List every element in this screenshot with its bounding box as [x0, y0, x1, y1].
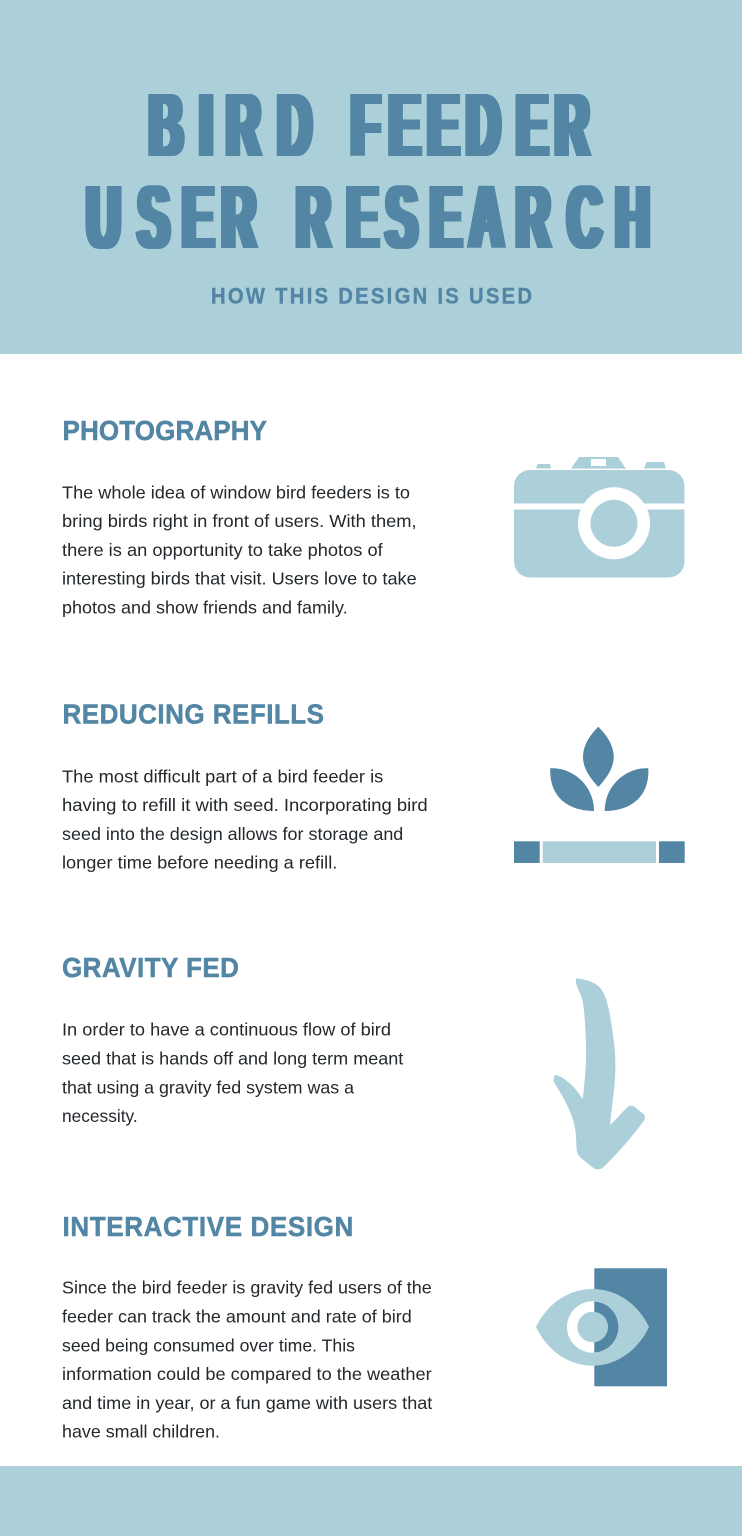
text block: reducing refills: longer time before needing a refill.: [62, 853, 337, 873]
text block: photography: photos and show friends and family.: [62, 598, 348, 618]
text block: reducing refills: [62, 766, 428, 873]
text block: gravity fed: necessity.: [62, 1106, 138, 1126]
panel: gravity fed: [62, 952, 645, 1169]
panel: photography: [62, 415, 684, 618]
panel: interactive design: [62, 1211, 667, 1442]
icon: eye: [536, 1268, 667, 1386]
text block: gravity fed: In order to have a continuous flow of bird: [62, 1020, 391, 1040]
text block: gravity fed: seed that is hands off and long term meant: [62, 1048, 403, 1068]
title: [87, 76, 649, 268]
icon: camera: [514, 457, 684, 578]
panel: footer: [0, 1466, 742, 1536]
text block: interactive design: feeder can track the amount and rate of bird: [62, 1306, 412, 1326]
text block: reducing refills: having to refill it with seed. Incorporating bird: [62, 795, 428, 815]
text block: gravity fed: that using a gravity fed system was a: [62, 1077, 354, 1097]
heading: reducing refills: REDUCING REFILLS: [62, 698, 324, 730]
text block: interactive design: seed being consumed over time. This: [62, 1335, 355, 1355]
subtitle: HOW THIS DESIGN IS USED: [211, 285, 532, 309]
text block: photography: The whole idea of window bird feeders is to: [62, 482, 410, 502]
text block: interactive design: [62, 1278, 432, 1442]
text block: photography: interesting birds that visit. Users love to take: [62, 569, 417, 589]
panel: header: [0, 0, 742, 354]
text block: reducing refills: seed into the design allows for storage and: [62, 824, 403, 844]
panel: reducing refills: [62, 698, 685, 873]
text block: interactive design: information could be compared to the weather: [62, 1364, 432, 1384]
text block: gravity fed: [62, 1020, 403, 1126]
text block: interactive design: Since the bird feeder is gravity fed users of the: [62, 1278, 432, 1298]
heading: gravity fed: GRAVITY FED: [62, 952, 239, 983]
title: BIRD FEEDER: [149, 76, 589, 176]
text block: photography: there is an opportunity to take photos of: [62, 540, 383, 560]
title: USER RESEARCH: [87, 168, 649, 268]
text block: photography: [62, 482, 417, 618]
icon: leaves and bar: [514, 727, 685, 863]
heading: interactive design: INTERACTIVE DESIGN: [62, 1211, 353, 1242]
text block: interactive design: and time in year, or a fun game with users that: [62, 1393, 432, 1413]
heading: photography: PHOTOGRAPHY: [62, 415, 267, 446]
icon: curved arrow: [554, 978, 645, 1169]
text block: interactive design: have small children.: [62, 1422, 220, 1442]
text block: photography: bring birds right in front of users. With them,: [62, 511, 417, 531]
text block: reducing refills: The most difficult part of a bird feeder is: [62, 766, 384, 786]
